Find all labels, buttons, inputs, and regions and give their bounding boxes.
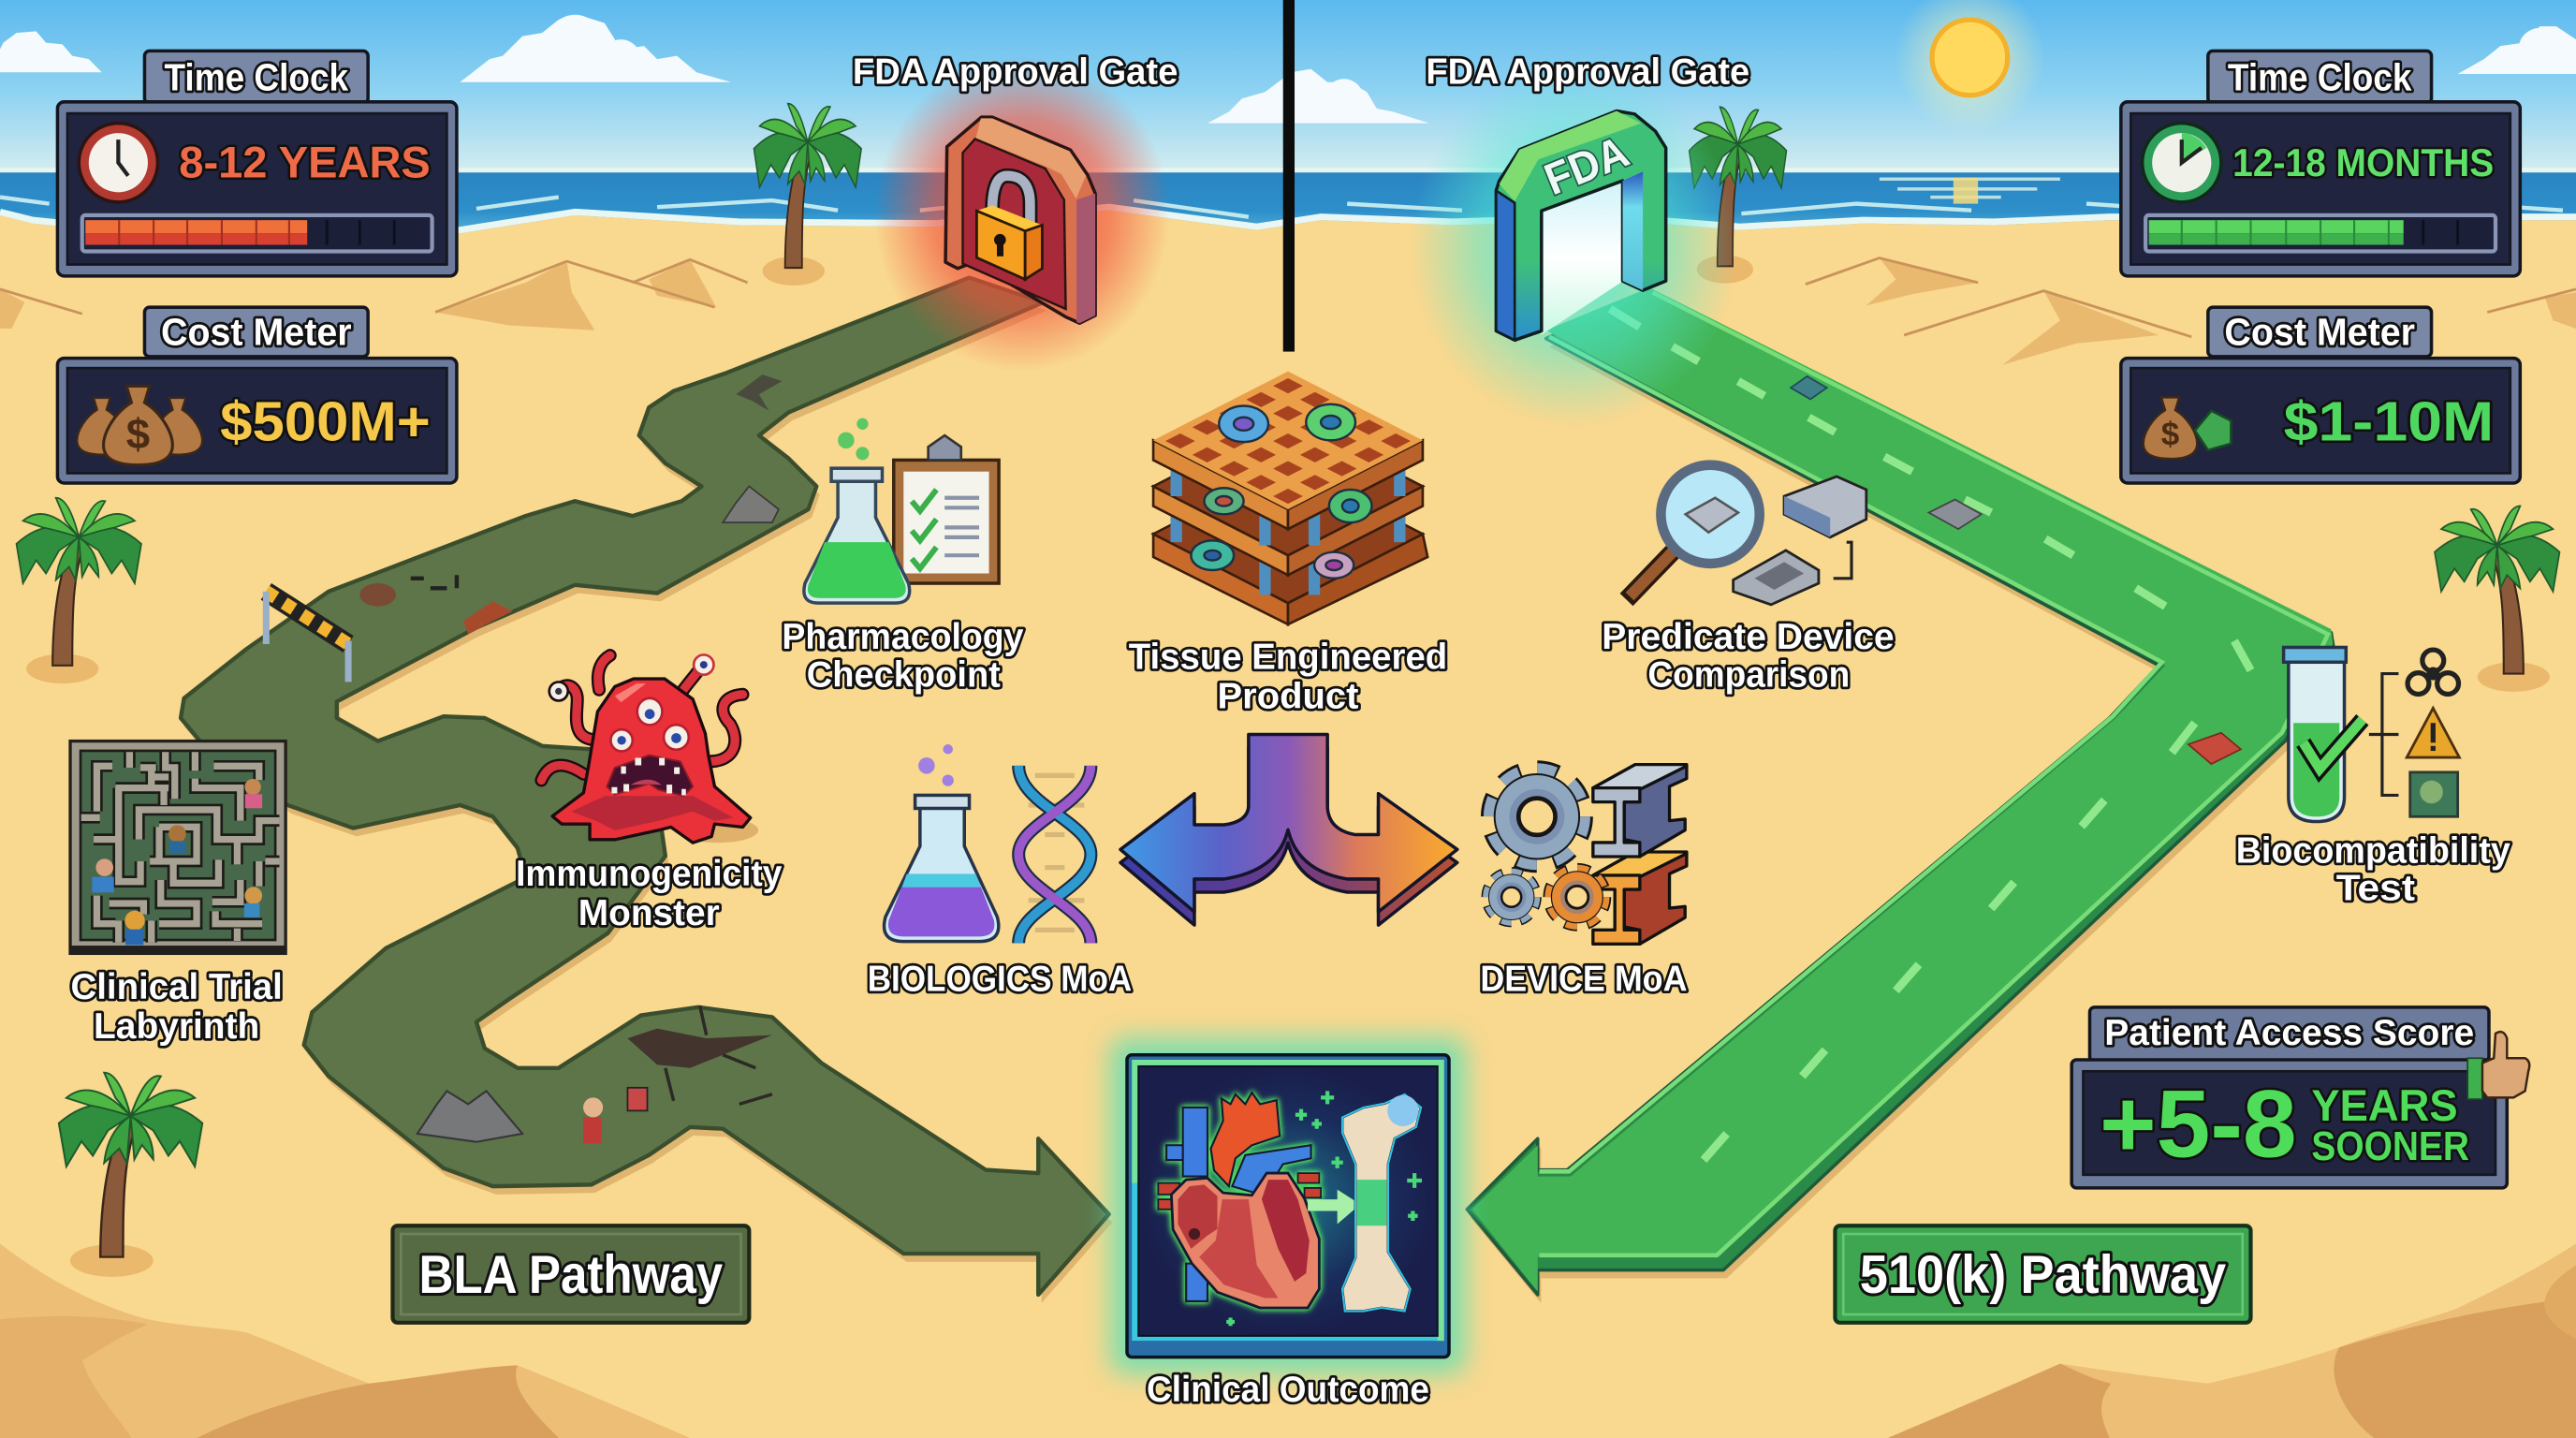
label: Clinical Trial Labyrinth: Clinical Trial: [70, 967, 283, 1007]
background: upper dunes: [0, 258, 2576, 365]
panel: cost meter right: [2121, 307, 2520, 483]
icon: bone: [1342, 1094, 1421, 1312]
label: Pharmacology Checkpoint: Pharmacology: [782, 617, 1024, 657]
road rock and traveller lower: [417, 1005, 772, 1143]
background: sky: [0, 0, 2576, 171]
label: Tissue Engineered Product: Tissue Engineered: [1129, 637, 1447, 677]
green flask: [804, 418, 910, 603]
panel: patient access score: [2071, 1007, 2529, 1188]
BLA pathway road: [181, 278, 1109, 1295]
test tube: [2284, 647, 2346, 822]
panel: clinical outcome: [1127, 1055, 1449, 1357]
background: shore foam: [0, 198, 2576, 230]
label: Tissue Engineered Product: Product: [1218, 676, 1359, 716]
icon: predicate device comparison: [1627, 465, 1866, 605]
heading: FDA Approval Gate right: FDA Approval Gate: [1426, 52, 1749, 93]
time value: 8-12 YEARS: [179, 139, 431, 188]
510(k) road shadow: [1471, 299, 2338, 1303]
icon: padlock: [976, 176, 1042, 279]
label: Biocompatibility Test: [2236, 830, 2510, 909]
sparkles: [1226, 1091, 1422, 1326]
icon: thumbs up: [2467, 1032, 2529, 1099]
icon: immunogenicity monster: [541, 654, 758, 843]
label: Immunogenicity Monster: Monster: [578, 893, 720, 933]
label: Biocompatibility Test: Test: [2336, 869, 2415, 909]
scaffold top layer: [1153, 372, 1423, 529]
background: lower left dunes: [0, 1244, 690, 1438]
road rock upper: [723, 486, 779, 522]
road bumps: [359, 575, 513, 634]
score unit: SOONER: [2311, 1123, 2469, 1169]
icon: money bags: $: [126, 410, 150, 458]
tab: cost meter: Cost Meter: [161, 311, 352, 354]
orange beam: [1593, 852, 1687, 944]
heading: FDA Approval Gate left: FDA Approval Gate: [853, 52, 1178, 93]
progress bar green: [2145, 215, 2496, 252]
icon: warning triangle: [2407, 708, 2459, 757]
label: BIOLOGICS MoA: BIOLOGICS MoA: [868, 959, 1132, 999]
510(k) pathway road: [1467, 287, 2334, 1295]
maze people: [92, 779, 262, 945]
label: Biocompatibility Test: Biocompatibility: [2236, 830, 2510, 871]
background: sea: [0, 168, 2576, 246]
tab: patient access score: [2089, 1007, 2489, 1062]
tab: time clock right: Time Clock: [2228, 56, 2412, 99]
icon: tissue engineered scaffold: [1153, 372, 1427, 624]
BLA road shadow: [184, 286, 1112, 1303]
device chip: [1734, 550, 1819, 605]
green road dashes: [1610, 309, 2250, 1160]
icon: money bags: [77, 386, 202, 465]
tab: time clock: Time Clock: [165, 56, 349, 99]
panel: BLA Pathway badge: [392, 1225, 749, 1323]
road crack top: [736, 374, 782, 411]
panel: BLA Pathway badge: BLA Pathway: [419, 1245, 723, 1305]
label: Immunogenicity Monster: [516, 854, 783, 933]
label: Clinical Trial Labyrinth: [70, 967, 283, 1047]
tab: patient access score: Patient Access Score: [2104, 1013, 2474, 1053]
icon: clock red: [79, 124, 157, 202]
background: lower right dunes: [1888, 1244, 2576, 1438]
panel: 510(k) Pathway badge: 510(k) Pathway: [1860, 1245, 2226, 1305]
cells: [1191, 404, 1372, 579]
icon: money bag and cash: $: [2161, 417, 2180, 453]
icon: biohazard: [2408, 650, 2459, 694]
label: Predicate Device Comparison: Comparison: [1647, 655, 1850, 696]
tab: cost meter right: Cost Meter: [2224, 311, 2415, 354]
panel: time clock right: [2121, 51, 2520, 276]
monster eyes: [549, 654, 713, 751]
road hurdle: [266, 592, 348, 682]
gate sign text: FDA: [1538, 127, 1635, 205]
icon: heart: [1158, 1093, 1321, 1308]
icon: clinical trial labyrinth: [68, 740, 287, 955]
score unit: [2311, 1081, 2469, 1169]
progress bar red: [82, 215, 432, 252]
monster mouth: [607, 756, 693, 796]
green FDA gate: [1496, 110, 1666, 340]
clipboard: [894, 435, 999, 583]
icon: gears and beams: [1487, 765, 1687, 944]
label: Immunogenicity Monster: Immunogenicity: [516, 854, 783, 894]
label: Clinical Outcome: Clinical Outcome: [1147, 1370, 1429, 1410]
icon: biologics flask and DNA: [885, 744, 1090, 943]
label: Tissue Engineered Product: [1129, 637, 1447, 716]
icon: biocompatibility test: [2284, 647, 2459, 822]
arrow: split: [1120, 734, 1457, 925]
gate glow red: [874, 56, 1170, 372]
red FDA gate: [945, 117, 1095, 323]
purple flask: [885, 744, 999, 942]
panel: cost meter left: [57, 307, 457, 483]
gate glow cyan: [1410, 66, 1738, 427]
cost value: $500M+: [220, 389, 431, 452]
icon: pharmacology flask and clipboard: [804, 418, 999, 603]
device box: [1784, 477, 1866, 537]
label: Pharmacology Checkpoint: Checkpoint: [807, 655, 1001, 696]
time value right: 12-18 MONTHS: [2232, 140, 2494, 184]
DNA helix: [1018, 766, 1090, 943]
icon: healing arrow: [1308, 1190, 1360, 1224]
check mark: [2304, 720, 2363, 769]
background: sun: [1895, 0, 2045, 133]
score value: +5-8: [2100, 1071, 2297, 1178]
cost value right: $1-10M: [2284, 389, 2494, 452]
label: Predicate Device Comparison: Predicate Device: [1602, 617, 1895, 657]
label: Predicate Device Comparison: [1602, 617, 1895, 696]
icon: clock green: [2143, 124, 2221, 202]
score unit: YEARS: [2311, 1081, 2458, 1131]
panel: 510(k) Pathway badge: [1835, 1225, 2250, 1323]
steel beam: [1593, 765, 1687, 857]
label: Pharmacology Checkpoint: [782, 617, 1024, 696]
icon: cell sample: [2410, 772, 2458, 816]
background: clouds: [0, 15, 2576, 124]
scaffold middle layer: [1153, 418, 1423, 575]
scaffold bottom layer: [1153, 465, 1427, 624]
label: DEVICE MoA: DEVICE MoA: [1480, 959, 1687, 999]
magnifier: [1627, 465, 1760, 600]
icon: money bag and cash: [2144, 397, 2231, 459]
panel: time clock left: [57, 51, 457, 276]
label: Clinical Trial Labyrinth: Labyrinth: [94, 1006, 259, 1047]
card glow: [1110, 1038, 1466, 1373]
divider: [1283, 0, 1295, 352]
road stones: [1791, 376, 2241, 764]
